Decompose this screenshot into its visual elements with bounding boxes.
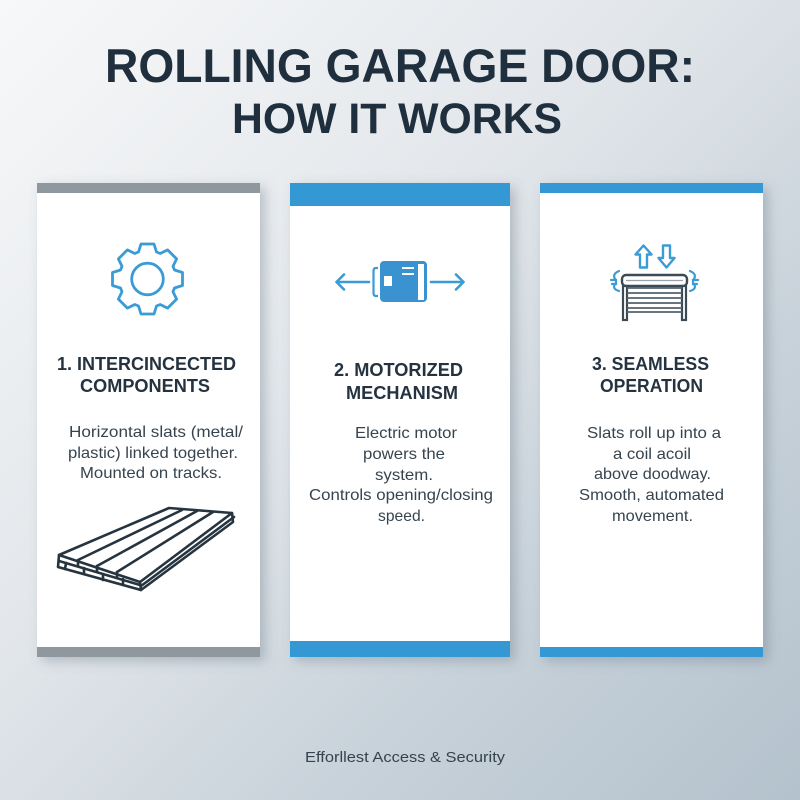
heading: MECHANISM [346,383,458,403]
body text: plastic) linked together. [68,445,238,462]
heading [334,360,463,403]
body text [579,425,724,525]
icon: motor with arrows [336,261,464,302]
body text [309,425,493,525]
icon: rolling door [611,246,698,320]
top bar [290,183,510,206]
body text: a coil acoil [613,446,691,463]
body text: Electric motor [355,425,458,442]
body text: powers the [363,446,445,463]
body text: Slats roll up into a [587,425,721,442]
body text: system. [375,467,433,484]
panel: interconnected components [37,183,260,657]
heading: 3. SEAMLESS [592,354,709,374]
heading [592,354,709,396]
body text: Smooth, automated [579,487,724,504]
heading [57,354,236,396]
heading: OPERATION [600,376,703,396]
heading: 2. MOTORIZED [334,360,463,380]
top bar [540,183,763,193]
bottom bar [37,647,260,657]
footer tagline: Efforllest Access & Security [305,749,506,766]
body text: movement. [612,508,693,525]
heading: 1. INTERCINCECTED [57,354,236,374]
top bar [37,183,260,193]
icon: slats [58,508,234,590]
panel: seamless operation [540,183,763,657]
card background [540,183,763,657]
heading: COMPONENTS [80,376,210,396]
title: HOW IT WORKS [232,95,562,143]
body text: Controls opening/closing [309,487,493,504]
bottom bar [290,641,510,657]
body text: Horizontal slats (metal/ [69,424,244,441]
card background [290,183,510,657]
body text: above doodway. [594,466,711,483]
panel: motorized mechanism [290,183,510,657]
card background [37,183,260,657]
bottom bar [540,647,763,657]
icon: gear [112,244,182,314]
body text: Mounted on tracks. [80,465,222,482]
body text: speed. [378,508,425,525]
title: ROLLING GARAGE DOOR: [105,39,695,92]
body text [68,424,244,482]
title [105,39,695,143]
